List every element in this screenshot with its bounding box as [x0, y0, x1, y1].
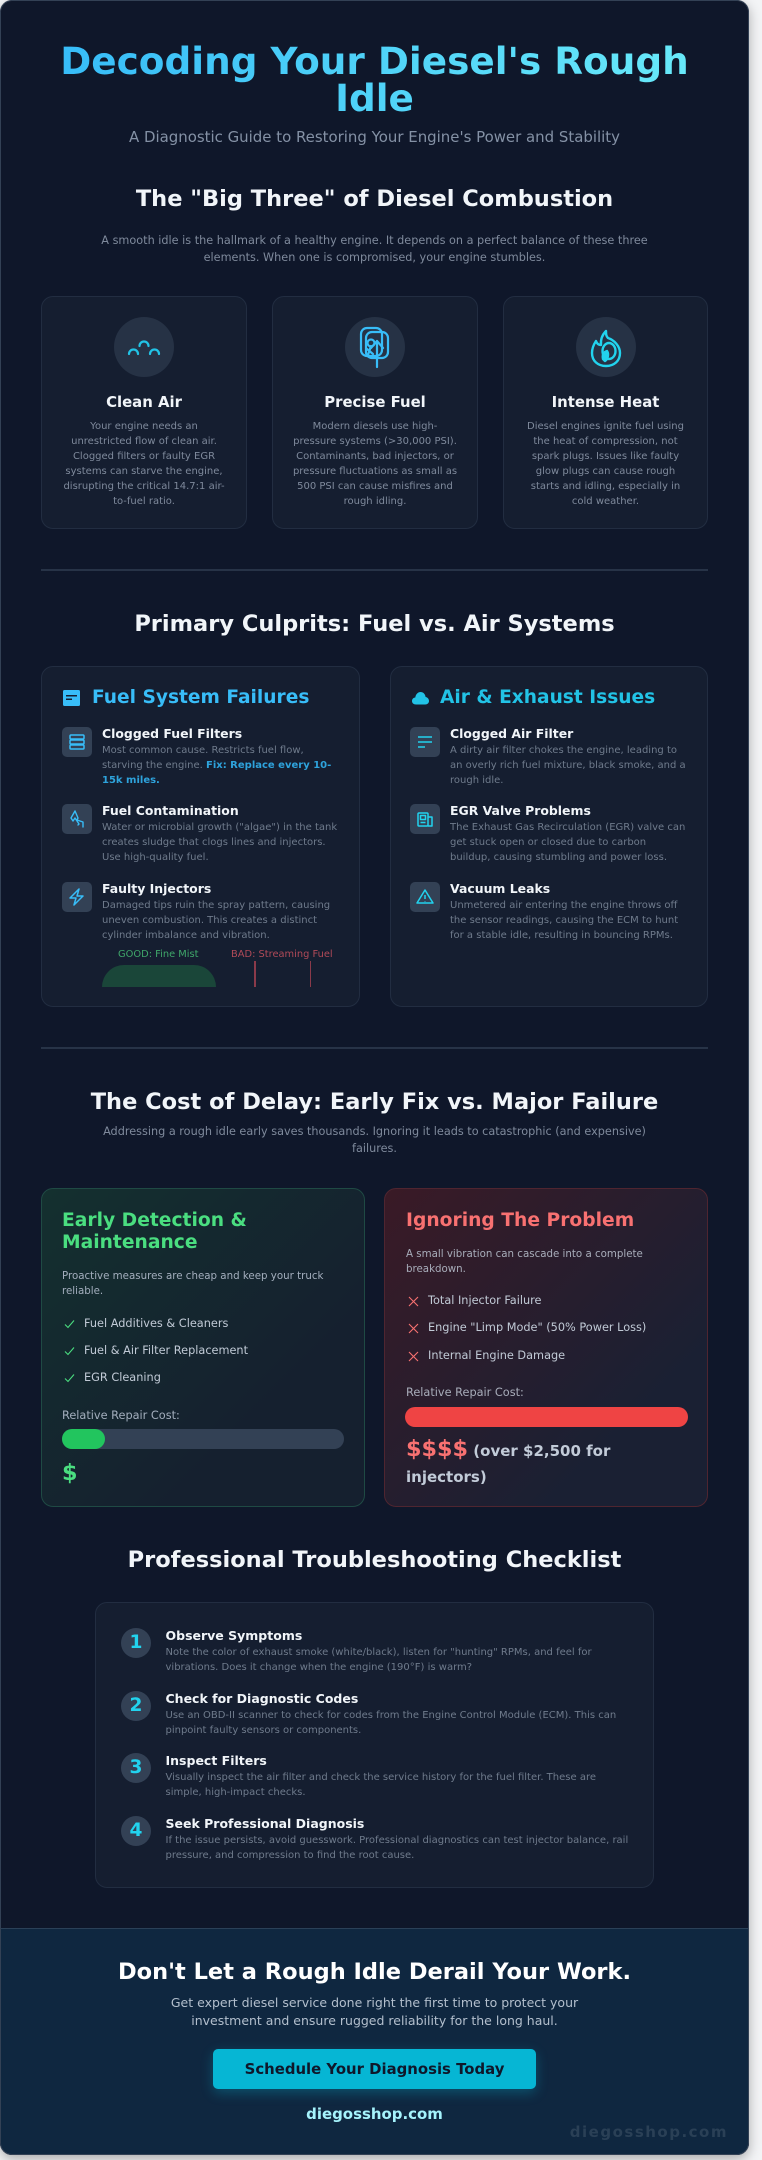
step text: simple, high-impact checks. — [166, 1786, 306, 1798]
card text: 500 PSI can cause misfires and — [297, 480, 453, 492]
item text — [102, 822, 337, 863]
panel: clean air — [41, 296, 247, 529]
bar fill — [62, 1429, 105, 1449]
list item: egr: EGR Cleaning — [84, 1371, 161, 1384]
item title: EGR Valve Problems — [450, 803, 591, 818]
card text: the heat of compression, not — [533, 436, 678, 446]
step title: Seek Professional Diagnosis — [166, 1816, 364, 1831]
step title: Check for Diagnostic Codes — [166, 1691, 358, 1706]
card text — [527, 420, 684, 506]
item title: Clogged Air Filter — [450, 726, 573, 741]
item text: 15k miles. — [102, 775, 160, 786]
heading: cost of delay: The Cost of Delay: Early Fix vs. Major Failure — [91, 1089, 658, 1115]
heading: big three: The "Big Three" of Diesel Combustion — [136, 186, 613, 212]
step 4 — [121, 1816, 628, 1860]
list item: limp mode: Engine "Limp Mode" (50% Power Loss) — [428, 1321, 646, 1334]
cta button — [213, 2049, 536, 2089]
step number — [121, 1628, 151, 1658]
benefit list — [64, 1317, 248, 1384]
item text: creates sludge that clogs lines and injectors. — [102, 837, 326, 848]
step number — [121, 1691, 151, 1721]
icon: lightning — [62, 882, 92, 912]
step text: Note the color of exhaust smoke (white/black), listen for "hunting" RPMs, and feel for — [166, 1646, 592, 1658]
card text: Contaminants, bad injectors, or — [296, 450, 454, 462]
step number — [121, 1753, 151, 1783]
heading: primary culprits: Primary Culprits: Fuel vs. Air Systems — [134, 611, 615, 637]
step text — [166, 1710, 616, 1736]
fine mist shape — [102, 965, 216, 987]
step number — [121, 1816, 151, 1846]
cost bar: high — [405, 1407, 688, 1427]
item title: Vacuum Leaks — [450, 881, 550, 896]
label: bad spray: BAD: Streaming Fuel — [231, 949, 333, 960]
step text: pressure, and compression to find the root cause. — [166, 1850, 414, 1860]
card text: to-fuel ratio. — [113, 496, 175, 506]
item text — [450, 745, 686, 786]
panel: ignoring the problem — [384, 1188, 708, 1507]
cost value: $$$$ (over $2,500 for — [406, 1436, 610, 1462]
step title: Observe Symptoms — [166, 1628, 302, 1643]
step number: 2 — [130, 1695, 142, 1716]
step text: Use an OBD-II scanner to check for codes from the Engine Control Module (ECM). This can — [166, 1710, 616, 1720]
card text: cold weather. — [572, 496, 639, 506]
icon: fuel injector — [345, 317, 405, 377]
card text: starts and idling, especially in — [531, 480, 680, 492]
title: Decoding Your Diesel's Rough — [60, 39, 689, 83]
panel: precise fuel — [272, 296, 478, 529]
panel: early detection — [41, 1188, 365, 1507]
item: clogged air filter — [410, 726, 686, 786]
card text: glow plugs can cause rough — [536, 466, 675, 476]
step text — [166, 1772, 596, 1798]
cta text — [0, 1994, 749, 2029]
panel text: A small vibration can cascade into a complete — [406, 1248, 643, 1260]
title: Idle — [335, 76, 414, 120]
item text: Damaged tips ruin the spray pattern, causing — [102, 900, 330, 911]
step 3 — [121, 1753, 596, 1798]
panel: fuel system failures — [41, 666, 360, 1007]
item title: Clogged Fuel Filters — [102, 726, 242, 741]
card text: pressure fluctuations as small as — [293, 466, 457, 476]
cost value: $ — [62, 1460, 78, 1486]
label: good spray: GOOD: Fine Mist — [118, 949, 198, 960]
cta text: Get expert diesel service done right the first time to protect your — [171, 1995, 578, 2010]
cost bar: low — [62, 1429, 344, 1449]
item title: Faulty Injectors — [102, 881, 211, 896]
card title: Intense Heat — [552, 393, 659, 411]
icon: air — [114, 317, 174, 377]
heading: checklist: Professional Troubleshooting Checklist — [128, 1547, 621, 1573]
item text: get stuck open or closed due to carbon — [450, 837, 646, 848]
item text: the sensor readings, causing the ECM to hunt — [450, 915, 678, 926]
list item: additives: Fuel Additives & Cleaners — [84, 1317, 228, 1330]
item text: buildup, causing stumbling and power loss. — [450, 852, 667, 863]
cost label: Relative Repair Cost: — [406, 1386, 524, 1399]
panel heading — [62, 1210, 247, 1253]
subtitle: A Diagnostic Guide to Restoring Your Engine's Power and Stability — [129, 128, 620, 146]
panel text: reliable. — [62, 1284, 103, 1296]
step text — [166, 1834, 628, 1860]
item text: Use high-quality fuel. — [102, 852, 209, 863]
step number: 3 — [130, 1757, 142, 1778]
icon: valve — [410, 804, 440, 834]
item text: Unmetered air entering the engine throws off — [450, 900, 677, 911]
item text: cylinder imbalance and vibration. — [102, 930, 270, 941]
card text: rough idling. — [344, 496, 406, 506]
card text: unrestricted flow of clean air. — [71, 436, 217, 446]
stream line left — [254, 961, 256, 987]
item text — [450, 822, 685, 863]
card text — [63, 420, 225, 506]
list item: engine damage: Internal Engine Damage — [428, 1349, 565, 1362]
icon: lines — [410, 727, 440, 757]
item title: Fuel Contamination — [102, 803, 239, 818]
item text — [102, 745, 331, 786]
cost label: Relative Repair Cost: — [62, 1409, 180, 1422]
cta heading: Don't Let a Rough Idle Derail Your Work. — [118, 1959, 631, 1985]
item text: for a stable idle, resulting in bouncing RPMs. — [450, 930, 673, 941]
item text: Most common cause. Restricts fuel flow, — [102, 745, 304, 756]
item text: an overly rich fuel mixture, black smoke, and a — [450, 760, 686, 771]
item text: A dirty air filter chokes the engine, leading to — [450, 745, 677, 756]
card text: pressure systems (>30,000 PSI). — [293, 436, 457, 446]
risk list — [408, 1294, 646, 1362]
intro text: big three: A smooth idle is the hallmark of a healthy engine. It depends on a perfect balance of these three — [101, 234, 648, 247]
step text — [166, 1646, 592, 1672]
title — [0, 43, 749, 118]
icon: filter — [62, 727, 92, 757]
step 1 — [121, 1628, 592, 1672]
step text: Visually inspect the air filter and check the service history for the fuel filter. These are — [166, 1772, 596, 1782]
item: faulty injectors — [62, 881, 330, 941]
icon: fuel panel — [63, 690, 80, 706]
item text: uneven combustion. This creates a distinct — [102, 915, 317, 926]
panel heading: Early Detection & — [62, 1210, 247, 1231]
item text: rough idle. — [450, 775, 503, 786]
card text: Clogged filters or faulty EGR — [73, 450, 215, 462]
item text: starving the engine. Fix: Replace every 10- — [102, 760, 331, 771]
panel text: breakdown. — [406, 1262, 466, 1274]
cta button: Schedule Your Diagnosis Today — [245, 2060, 504, 2078]
panel: checklist — [95, 1602, 654, 1888]
item: vacuum leaks — [410, 881, 678, 941]
card text: Diesel engines ignite fuel using — [527, 420, 684, 432]
panel: air and exhaust — [390, 666, 708, 1007]
watermark: diegosshop.com — [570, 2123, 728, 2141]
intro text: big three: elements. When one is compromised, your engine stumbles. — [204, 251, 545, 264]
website: diegosshop.com — [306, 2105, 443, 2123]
card text: disrupting the critical 14.7:1 air- — [63, 480, 225, 492]
item: fuel contamination — [62, 803, 337, 863]
card title: Precise Fuel — [324, 393, 426, 411]
call to action band — [0, 1928, 749, 2155]
list item: filters: Fuel & Air Filter Replacement — [84, 1344, 248, 1357]
card text: spark plugs. Issues like faulty — [532, 450, 679, 462]
cost value — [406, 1436, 610, 1486]
stream line right — [310, 961, 311, 987]
item: egr valve problems — [410, 803, 685, 863]
panel heading: Fuel System Failures — [92, 687, 309, 708]
intro text: cost of delay: failures. — [352, 1142, 397, 1155]
card title: Clean Air — [106, 393, 182, 411]
item text: Water or microbial growth ("algae") in the tank — [102, 822, 337, 833]
icon: cloud — [412, 692, 429, 704]
intro text: big three — [101, 234, 648, 264]
step text: vibrations. Does it change when the engine (190°F) is warm? — [166, 1662, 472, 1672]
item text: The Exhaust Gas Recirculation (EGR) valve can — [450, 822, 685, 833]
panel heading: Maintenance — [62, 1232, 198, 1253]
panel text — [62, 1270, 324, 1296]
item text — [102, 900, 330, 941]
icon: flame — [576, 317, 636, 377]
step text: pinpoint faulty sensors or components. — [166, 1724, 361, 1736]
panel heading: Ignoring The Problem — [406, 1210, 634, 1231]
icon: warning — [410, 882, 440, 912]
card text: Your engine needs an — [90, 420, 198, 432]
list item: injector failure: Total Injector Failure — [428, 1294, 542, 1307]
card text — [293, 420, 457, 506]
step number: 1 — [130, 1632, 142, 1653]
card text: systems can starve the engine, — [65, 466, 223, 476]
item: clogged fuel filters — [62, 726, 331, 786]
spray pattern diagram — [102, 949, 333, 987]
step text: If the issue persists, avoid guesswork. Professional diagnostics can test injector balance, rail — [166, 1834, 628, 1846]
cta text: investment and ensure rugged reliability for the long haul. — [191, 2012, 558, 2028]
panel: intense heat — [503, 296, 708, 529]
step 2 — [121, 1691, 616, 1736]
panel text — [406, 1248, 643, 1274]
cost value: injectors) — [406, 1468, 487, 1486]
intro text: cost of delay — [103, 1125, 646, 1155]
panel heading: Air & Exhaust Issues — [440, 687, 655, 708]
item text — [450, 900, 678, 941]
step title: Inspect Filters — [166, 1753, 267, 1768]
card text: Modern diesels use high- — [313, 420, 437, 432]
icon: contamination — [62, 804, 92, 834]
panel text: Proactive measures are cheap and keep your truck — [62, 1270, 323, 1282]
intro text: cost of delay: Addressing a rough idle early saves thousands. Ignoring it leads to catastrophic (and expensive) — [103, 1125, 646, 1138]
step number: 4 — [130, 1820, 142, 1841]
